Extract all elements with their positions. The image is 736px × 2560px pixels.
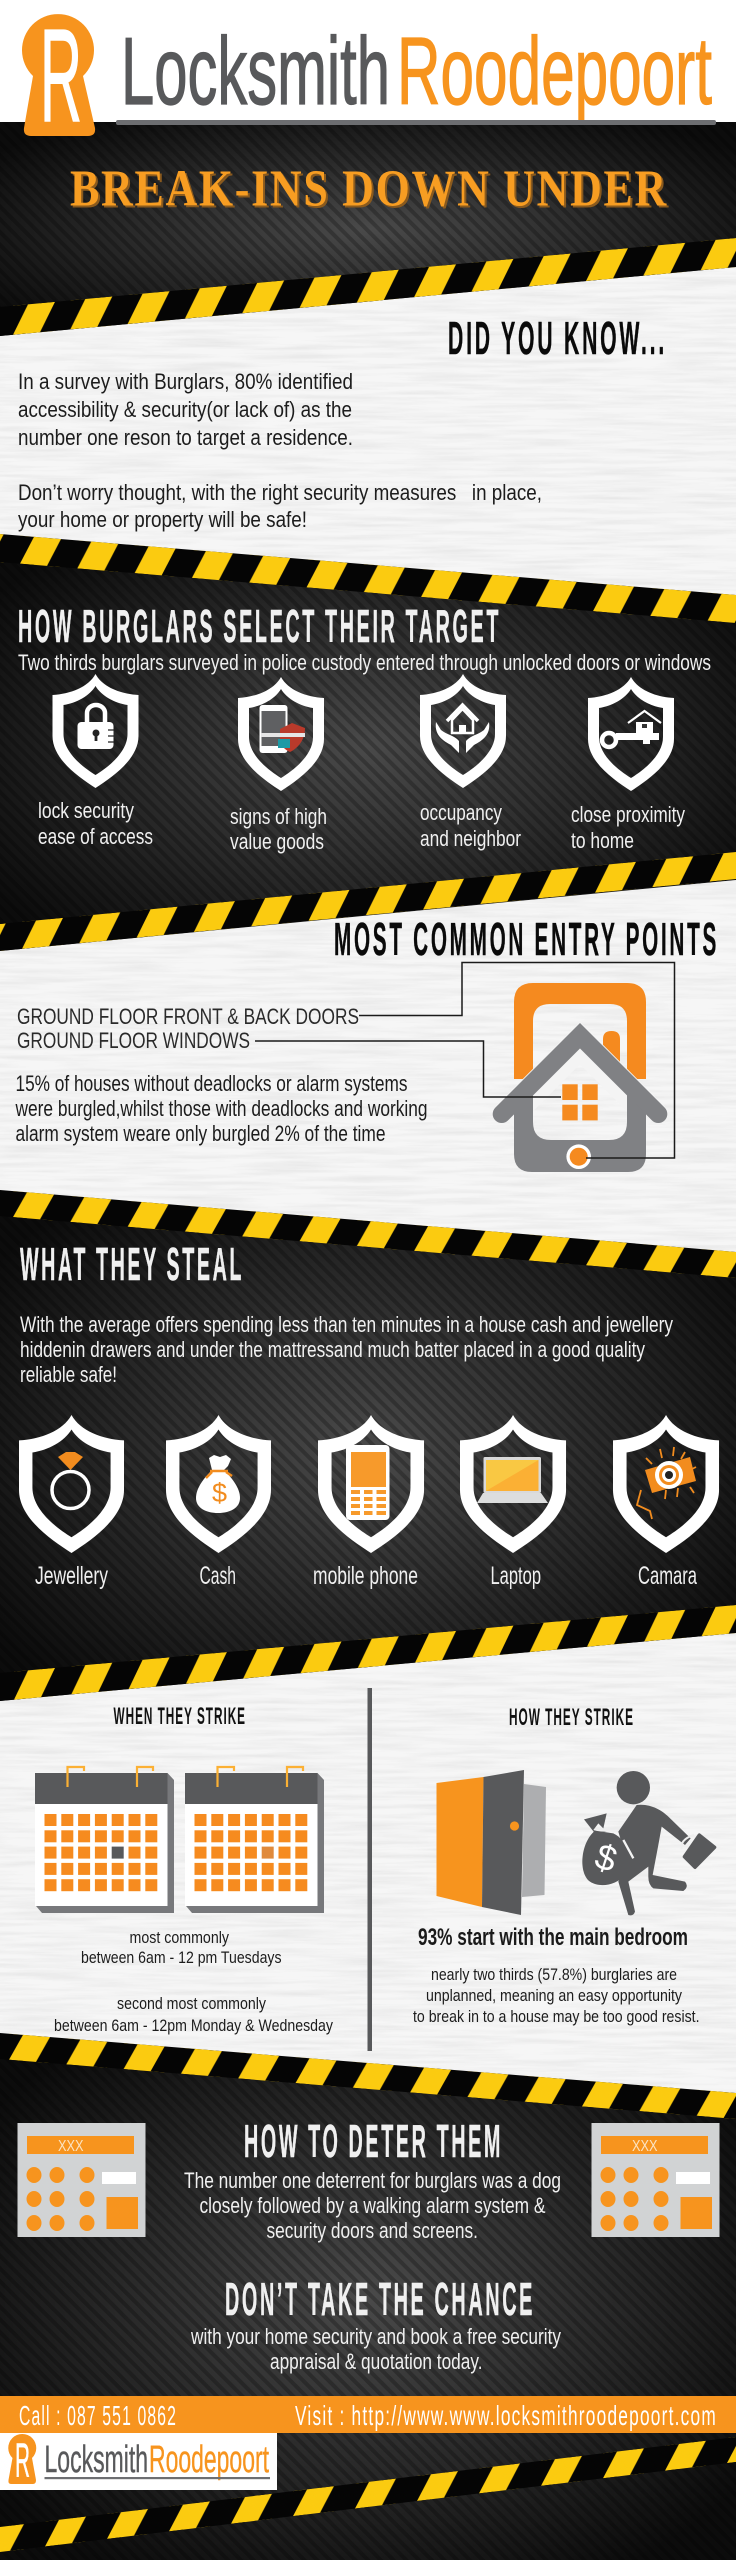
hazard stripe 5 <box>0 1605 736 1701</box>
label: close proximity to home: to home <box>571 828 634 853</box>
icon: alarm panel left <box>18 2123 146 2237</box>
arrow: doors connector <box>359 962 674 1158</box>
text: WHAT THEY STEAL <box>20 1238 244 1290</box>
text block: survey facts <box>18 369 542 532</box>
footer: small logo <box>0 2433 277 2490</box>
footer: orange contact bar <box>0 2396 736 2433</box>
text block: deadlock statistics: were burgled,whilst those with deadlocks and working <box>15 1096 427 1121</box>
hazard stripe 6 <box>0 2033 736 2119</box>
icon: house in hands shield <box>420 674 506 788</box>
icon: alarm panel right: XXX <box>632 2138 658 2155</box>
label: cash: Cash <box>200 1562 236 1590</box>
text block: unplanned burglaries: unplanned, meaning an easy opportunity <box>426 1986 682 2005</box>
text block: most common times: between 6am - 12 pm Tuesdays <box>81 1948 282 1967</box>
text block: deterrents: closely followed by a walking alarm system & <box>200 2193 546 2218</box>
icon: lock shield <box>52 674 138 788</box>
text block: most common times <box>54 1928 333 2035</box>
text: entry point labels: GROUND FLOOR WINDOWS <box>17 1028 250 1053</box>
text block: survey facts: In a survey with Burglars, 80% identified <box>18 369 353 394</box>
icon: house and phone <box>502 983 658 1172</box>
arrow: windows connector <box>255 1041 561 1097</box>
label: close proximity to home: close proximity <box>571 802 685 827</box>
icon: laptop shield <box>460 1415 566 1553</box>
text block: survey facts: your home or property will be safe! <box>18 507 307 532</box>
label: close proximity to home <box>571 802 685 853</box>
footer: orange contact bar: Call : 087 551 0862 <box>19 2400 177 2431</box>
footer: small logo: Locksmith <box>44 2439 148 2481</box>
icon: key and house shield <box>588 677 674 791</box>
text block: free appraisal: appraisal & quotation today. <box>270 2349 482 2374</box>
text block: survey facts: Don’t worry thought, with the right security measures in place, <box>18 480 542 505</box>
text block: what they steal intro <box>20 1312 673 1387</box>
icon: jewellery shield <box>19 1415 124 1553</box>
icon: phone shield <box>238 677 324 791</box>
text block: unplanned burglaries <box>413 1965 700 2026</box>
label: lock security: ease of access <box>38 824 153 849</box>
label: mobile phone: mobile phone <box>313 1562 418 1590</box>
hazard stripe 3 <box>0 852 736 951</box>
label: lock security <box>38 798 153 849</box>
hazard stripe 1 <box>0 238 736 336</box>
label: signs of high value goods <box>230 804 327 854</box>
icon: calendar 2 <box>185 1767 324 1913</box>
label: camara: Camara <box>638 1562 697 1590</box>
text block: what they steal intro: reliable safe! <box>20 1362 117 1387</box>
text block: most common times: between 6am - 12pm Monday & Wednesday <box>54 2016 333 2035</box>
text block: deadlock statistics <box>15 1071 427 1146</box>
text block: deadlock statistics: 15% of houses without deadlocks or alarm systems <box>16 1071 408 1096</box>
icon: cash shield: $ <box>212 1478 227 1508</box>
label: occupancy and neighbor: occupancy <box>420 800 502 825</box>
text block: most common times: second most commonly <box>117 1994 266 2013</box>
label: jewellery: Jewellery <box>35 1562 108 1590</box>
footer: small logo: Roodepoort <box>149 2439 269 2481</box>
text block: free appraisal: with your home security and book a free security <box>190 2324 561 2349</box>
hazard stripe 4 <box>0 1190 736 1278</box>
icon: alarm panel left: XXX <box>58 2138 84 2155</box>
text block: deterrents: security doors and screens. <box>266 2218 478 2243</box>
text: entry point labels <box>17 1004 359 1053</box>
text block: most common times: most commonly <box>130 1928 229 1947</box>
text block: survey facts: accessibility & security(or lack of) as the <box>18 397 352 422</box>
hazard stripe 2 <box>0 534 736 623</box>
hazard stripe 7 <box>0 2437 736 2552</box>
icon: camera shield <box>613 1415 719 1553</box>
label: lock security: lock security <box>38 798 134 823</box>
text: WHEN THEY STRIKE <box>114 1703 246 1730</box>
text block: unplanned burglaries: nearly two thirds (57.8%) burglaries are <box>431 1965 677 1984</box>
icon: calendar 1 <box>35 1767 174 1913</box>
text block: survey facts: number one reson to target a residence. <box>18 425 353 450</box>
icon: keyhole logo <box>22 2 95 149</box>
footer: small logo: R <box>15 2435 30 2488</box>
divider: strike columns <box>368 1688 372 2051</box>
label: signs of high value goods: signs of high <box>230 804 327 829</box>
icon: alarm panel right <box>592 2123 720 2237</box>
icon: mobile phone shield <box>318 1415 424 1553</box>
background: white brushed panels <box>0 230 736 2100</box>
label: occupancy and neighbor: and neighbor <box>420 826 521 851</box>
text block: deterrents <box>184 2168 561 2243</box>
header: white logo band <box>0 0 736 122</box>
text block: deterrents: The number one deterrent for burglars was a dog <box>184 2168 561 2193</box>
label: signs of high value goods: value goods <box>230 829 324 854</box>
label: occupancy and neighbor <box>420 800 521 851</box>
icon: burglar with bag <box>582 1771 715 1915</box>
text: dollar sign on bag: $ <box>590 1835 622 1880</box>
text block: free appraisal <box>190 2324 561 2374</box>
icon: keyhole logo: R <box>40 2 82 149</box>
logo wordmark: Locksmith <box>121 18 390 125</box>
text block: deadlock statistics: alarm system weare only burgled 2% of the time <box>16 1121 386 1146</box>
icon: cash shield <box>166 1415 271 1553</box>
icon: open door <box>436 1770 546 1915</box>
text: entry point labels: GROUND FLOOR FRONT & BACK DOORS <box>17 1004 359 1029</box>
label: laptop: Laptop <box>490 1562 541 1590</box>
